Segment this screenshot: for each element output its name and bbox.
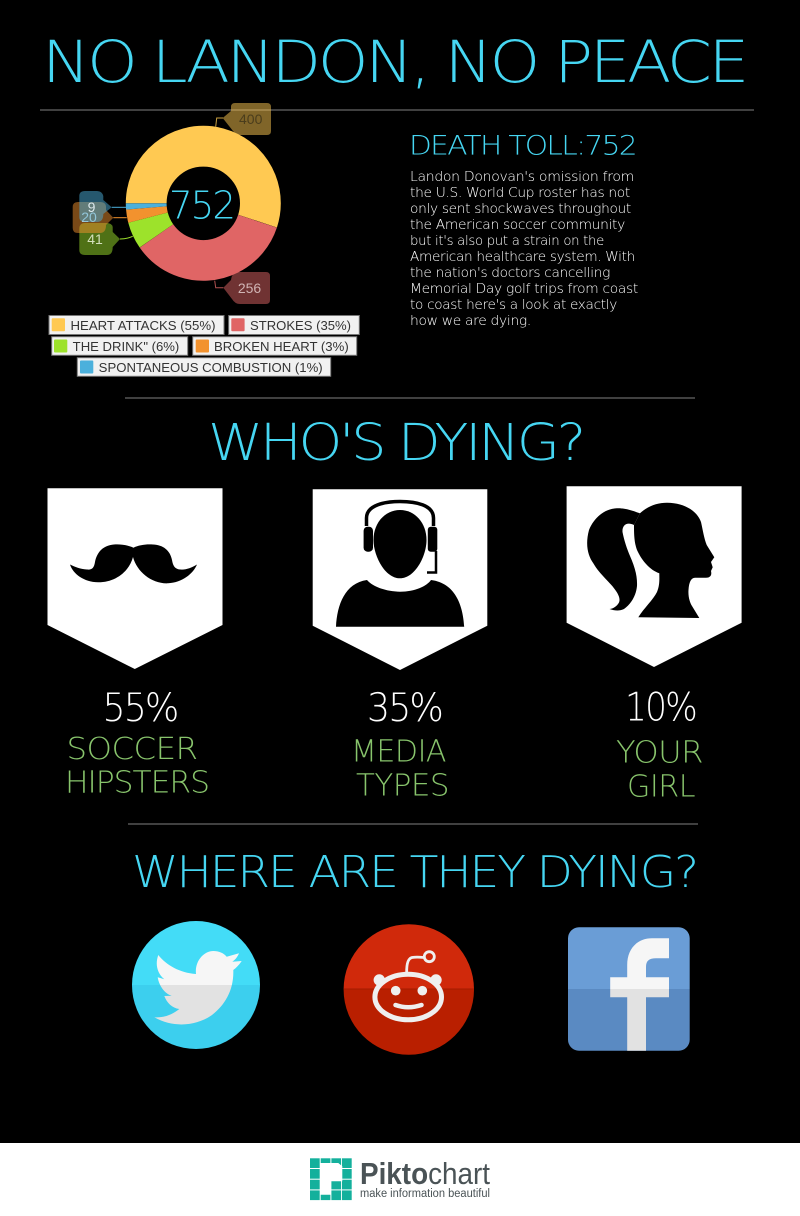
legend: strokes [229, 316, 359, 334]
banner [48, 488, 222, 669]
callout: 256: 256 [238, 280, 261, 296]
label: girl: GIRL [627, 770, 695, 804]
heading: death toll: DEATH TOLL:752 [409, 130, 636, 162]
stat: 10%: 10% [625, 686, 696, 730]
legend: broken heart: BROKEN HEART (3%) [214, 340, 349, 354]
legend: heart attacks: HEART ATTACKS (55%) [70, 319, 216, 333]
text block: intro paragraph: the American soccer community [410, 217, 625, 233]
footer band [0, 1143, 800, 1216]
text block: intro paragraph: the U.S. World Cup roster has not [410, 185, 630, 201]
callout: 9 [79, 191, 126, 222]
panel: chart legend [49, 316, 359, 376]
icon: facebook [568, 927, 690, 1051]
heading: where are they dying: WHERE ARE THEY DYING? [132, 847, 697, 898]
stat: 35%: 35% [367, 686, 442, 731]
stat: 55%: 55% [102, 686, 178, 731]
callout: 20: 20 [81, 209, 97, 225]
label: hipsters: HIPSTERS [65, 766, 209, 800]
text block: intro paragraph: Memorial Day golf trips from coast [410, 281, 638, 297]
panel: donut chart [73, 103, 283, 304]
panel: soccer hipsters [48, 488, 222, 800]
icon: reddit [344, 924, 474, 1055]
panel: media types [313, 489, 487, 804]
text block: intro paragraph: only sent shockwaves throughout [410, 201, 631, 217]
legend: the drink: THE DRINK" (6%) [73, 340, 179, 354]
legend: strokes: STROKES (35%) [250, 319, 351, 333]
callout: 400 [216, 103, 271, 135]
callout: 41 [79, 223, 133, 255]
text block: intro paragraph: the nation's doctors cancelling [410, 265, 610, 281]
logo wordmark: Piktochart [360, 1156, 490, 1191]
callout: 9: 9 [88, 199, 96, 215]
icon: mustache [70, 544, 197, 583]
legend: spontaneous combustion [77, 358, 331, 376]
text block: intro paragraph: how we are dying. [410, 313, 531, 329]
icon: twitter [132, 921, 260, 1049]
footer logo: piktochart [310, 1156, 490, 1200]
icon: headset person [336, 502, 464, 627]
panel: your girl [567, 486, 742, 804]
legend: broken heart [193, 337, 357, 355]
legend: the drink [52, 337, 188, 355]
text block: intro paragraph: to coast here's a look at exactly [410, 297, 617, 313]
label: media: MEDIA [351, 734, 446, 770]
title: NO LANDON, NO PEACE [42, 28, 746, 96]
chart slices [124, 124, 283, 283]
text block: intro paragraph [410, 169, 638, 329]
banner [313, 489, 487, 670]
callout: 256 [215, 272, 270, 304]
logo mark [310, 1158, 352, 1200]
callout: 400: 400 [239, 111, 263, 127]
label: your: YOUR [616, 736, 703, 770]
banner [567, 486, 742, 667]
logo tagline: make information beautiful [360, 1188, 490, 1200]
text block: intro paragraph: but it's also put a strain on the [410, 233, 604, 249]
callout: 41: 41 [87, 231, 103, 247]
label: types: TYPES [356, 768, 449, 804]
text block: intro paragraph: Landon Donovan's omission from [410, 169, 634, 185]
icon: ponytail silhouette [587, 503, 714, 618]
chart centre total: 752 [169, 184, 234, 228]
legend: heart attacks [49, 316, 224, 334]
heading: who's dying: WHO'S DYING? [208, 414, 583, 473]
legend: spontaneous combustion: SPONTANEOUS COMBUSTION (1%) [99, 361, 323, 375]
label: soccer: SOCCER [66, 732, 198, 767]
callout: 20 [73, 202, 127, 233]
text block: intro paragraph: American healthcare system. With [410, 249, 635, 265]
